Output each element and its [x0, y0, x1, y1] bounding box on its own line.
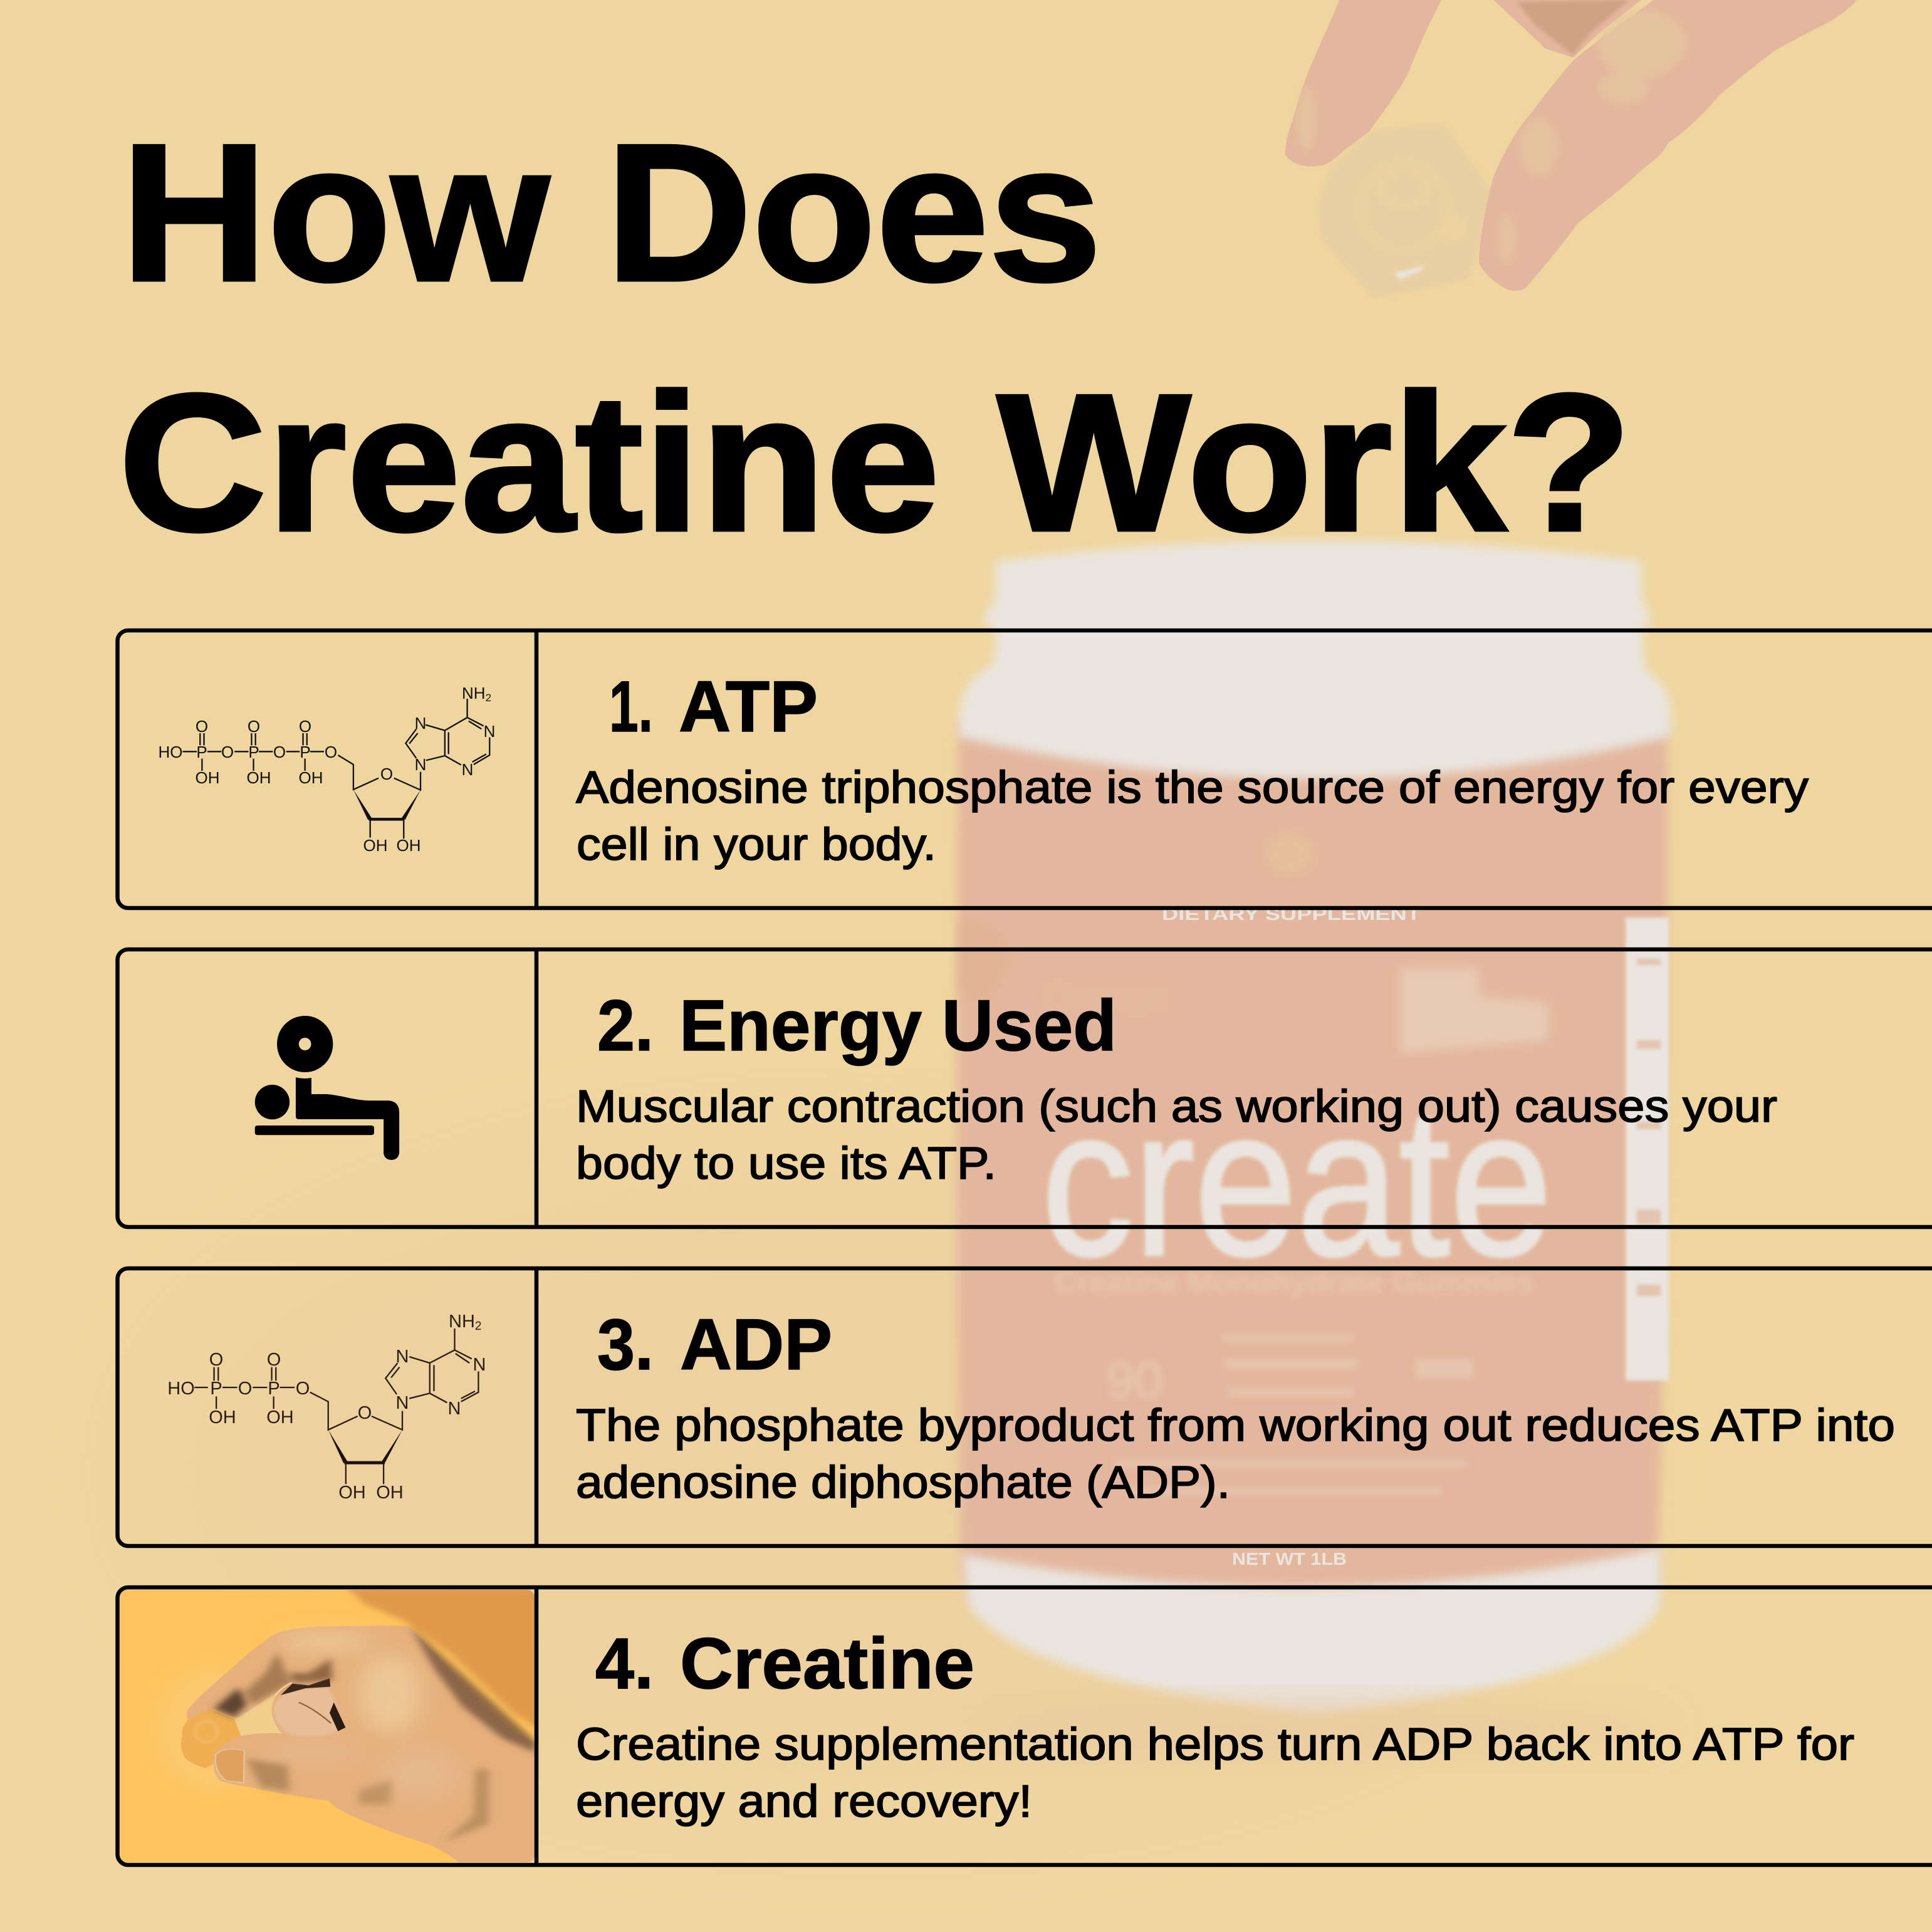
icon: ATP molecule: NH: [462, 684, 486, 702]
glow around gummy: [153, 1667, 238, 1792]
jar base: [962, 1548, 1661, 1714]
gummy highlight: [196, 1721, 217, 1742]
heading: Energy Used: [679, 986, 1117, 1066]
body text: [576, 1720, 1854, 1827]
icon: ATP molecule: N: [484, 722, 495, 741]
jar shadow: [965, 1701, 1667, 1758]
icon: ADP molecule: N: [396, 1393, 409, 1413]
jar label text: create: create: [1042, 1065, 1552, 1299]
background photo: fingers holding gummy: [1285, 0, 1857, 299]
finger fold shading: [214, 1653, 489, 1842]
jar label: serving callouts: 90: [1106, 1352, 1163, 1409]
icon: ATP molecule: OH: [396, 836, 421, 855]
highlight on finger edge: [275, 1683, 292, 1696]
icon: ATP molecule: P: [300, 743, 311, 761]
label white block: [1401, 968, 1548, 1053]
panel 2: Energy Used: [118, 949, 1932, 1227]
label side panel: [1626, 917, 1669, 1381]
icon: ATP molecule: O: [273, 743, 286, 761]
dark crevices: [281, 1678, 330, 1695]
left finger: [1285, 0, 1441, 167]
heading: 1.: [609, 667, 653, 747]
icon: ADP molecule: N: [473, 1355, 486, 1375]
photo backdrop: [346, 1590, 535, 1730]
gummy in fingers: [1317, 123, 1493, 299]
background warm tint: [157, 1147, 1598, 1799]
body text: Adenosine triphosphate is the source of energy for every: [576, 763, 1809, 813]
heading: [609, 667, 818, 747]
body text: [576, 763, 1809, 870]
title: How Does: [121, 104, 1102, 322]
icon: ATP molecule: HO: [158, 743, 183, 761]
heading: 2.: [597, 986, 654, 1066]
icon: ATP molecule: OH: [298, 768, 323, 787]
icon: ATP molecule: O: [221, 743, 234, 761]
panel 3: ADP: [118, 1268, 1932, 1546]
icon: bench press: [255, 1016, 399, 1160]
label small brand text: Orange: [1043, 975, 1169, 1017]
hand shape: [187, 1626, 535, 1866]
body text: Muscular contraction (such as working out) causes your: [576, 1082, 1777, 1132]
icon: ATP molecule: O: [380, 765, 393, 783]
icon: ATP molecule: N: [415, 755, 426, 774]
icon: ADP molecule: N: [396, 1347, 409, 1367]
background photo: supplement jar: [957, 540, 1671, 1758]
heading: ATP: [679, 667, 818, 747]
jar label text: dietary supplement: DIETARY SUPPLEMENT: [1162, 905, 1421, 924]
icon: ADP molecule: N: [448, 1399, 461, 1419]
icon: ATP molecule: OH: [196, 768, 219, 787]
icon: ADP molecule: OH: [376, 1483, 404, 1503]
icon: ATP molecule: O: [196, 717, 208, 736]
icon: ADP molecule: HO: [167, 1379, 195, 1399]
icon: ATP molecule: OH: [247, 768, 271, 787]
icon: ADP molecule: P: [210, 1379, 222, 1399]
icon: ATP molecule: N: [462, 760, 473, 779]
title: [118, 104, 1632, 572]
heading: 4.: [595, 1624, 654, 1704]
body text: Creatine supplementation helps turn ADP back into ATP for: [576, 1720, 1854, 1770]
jar lid: [958, 540, 1671, 778]
jar label text: product name: Creatine Monohydrate Gummies: [1055, 1266, 1534, 1298]
icon: ATP molecule: OH: [363, 836, 387, 855]
icon: ATP molecule: P: [248, 743, 259, 761]
label side panel text: [1637, 959, 1661, 1296]
body text: The phosphate byproduct from working out reduces ATP into: [576, 1401, 1895, 1451]
label sun mark: [1266, 832, 1313, 875]
icon: ADP molecule: [167, 1312, 486, 1503]
icon: ADP molecule: OH: [266, 1407, 294, 1428]
panel frame: [118, 1268, 1932, 1546]
icon: ATP molecule: O: [325, 743, 337, 761]
icon: ADP molecule: O: [238, 1379, 252, 1399]
panel frame: [118, 949, 1932, 1227]
heading: Creatine: [680, 1624, 974, 1704]
right finger: [1479, 0, 1857, 291]
heading: [597, 1305, 832, 1385]
body text: cell in your body.: [577, 820, 936, 870]
icon: ADP molecule: NH: [449, 1312, 475, 1332]
panel frame: [118, 630, 1932, 908]
jar label text: net weight: NET WT 1LB: [1232, 1549, 1347, 1569]
shading on back of hand: [410, 1626, 535, 1753]
label left brand shape: [959, 921, 1009, 1003]
thumb nail: [216, 1749, 244, 1783]
icon: ATP molecule: N: [415, 714, 426, 733]
icon: ATP molecule: O: [299, 717, 311, 736]
icon: ADP molecule: OH: [338, 1483, 366, 1503]
title: Creatine Work?: [118, 354, 1632, 572]
heading: 3.: [597, 1305, 654, 1385]
icon: ADP molecule: P: [268, 1379, 280, 1399]
gummy: [180, 1709, 241, 1768]
icon: ATP molecule: O: [248, 717, 260, 736]
icon: ADP molecule: O: [209, 1350, 223, 1370]
body text: adenosine diphosphate (ADP).: [576, 1458, 1230, 1508]
icon: ADP molecule: O: [296, 1379, 310, 1399]
palm and knuckle highlights: [267, 1632, 460, 1800]
icon: ADP molecule: 2: [475, 1320, 481, 1333]
icon: ATP molecule: 2: [486, 692, 491, 704]
shaded gap between fingers: [1493, 0, 1641, 58]
panel frame: [118, 1587, 1932, 1865]
icon: ADP molecule: O: [358, 1403, 372, 1423]
body text: [576, 1401, 1895, 1508]
icon: ATP molecule: P: [196, 743, 207, 761]
photo: hand holding gummy: [120, 1577, 549, 1866]
body text: body to use its ATP.: [576, 1139, 996, 1189]
panel 4: Creatine: [118, 1577, 1932, 1866]
gap between fingers: [234, 1692, 282, 1736]
finger highlights: [1298, 9, 1686, 263]
panel 1: ATP: [118, 630, 1932, 908]
icon: ADP molecule: OH: [209, 1407, 236, 1428]
jar label: serving callouts: [1106, 1335, 1473, 1495]
icon: ADP molecule: O: [267, 1350, 281, 1370]
icon: ATP molecule: [158, 684, 495, 855]
shaded gap texture: [1517, 0, 1629, 55]
body text: [576, 1082, 1777, 1189]
jar body: [957, 721, 1668, 1623]
body text: energy and recovery!: [576, 1777, 1032, 1827]
curled finger: [274, 1688, 343, 1736]
heading: ADP: [680, 1305, 832, 1385]
